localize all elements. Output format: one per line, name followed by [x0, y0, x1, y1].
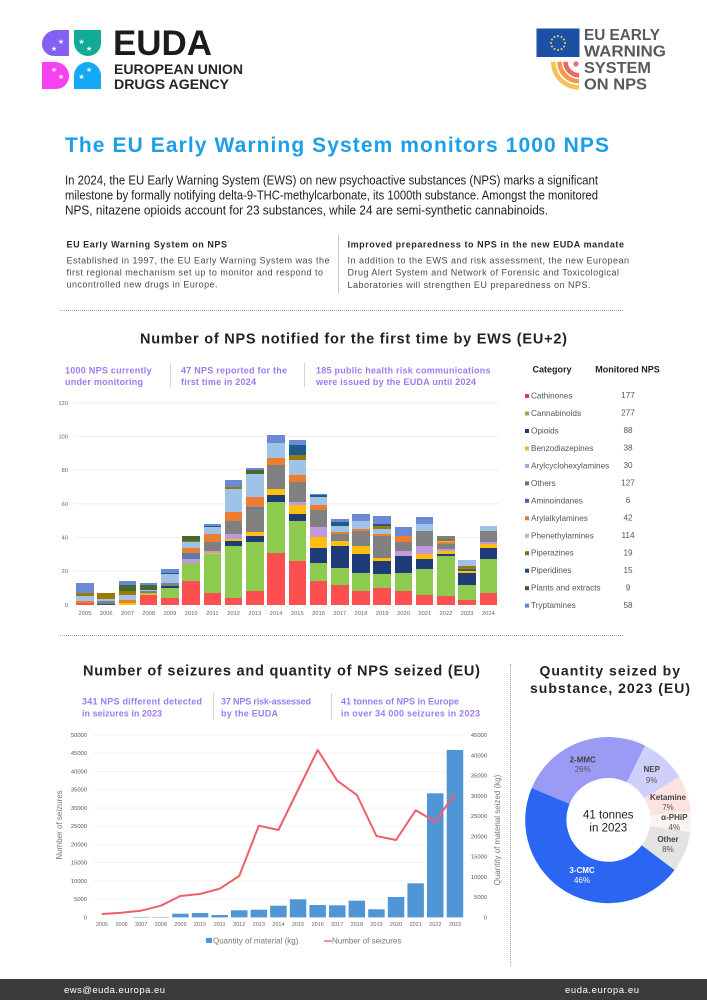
logo: EUDA	[42, 24, 243, 92]
key figures: notifications: 47 NPS reported for the	[181, 365, 287, 375]
panel: Improved preparedness to NPS: In addition to the EWS and risk assessment, the new European	[348, 256, 629, 266]
title: The EU Early Warning System monitors 1000 NPS	[65, 134, 609, 157]
combo chart: seizures and quantity by year: Number of seizures	[332, 936, 401, 946]
logo: EUDA: ★	[78, 73, 85, 81]
legend table: categories and monitored NPS: 30	[623, 461, 633, 470]
logo: EUDA: ★	[86, 66, 92, 74]
legend table: categories and monitored NPS: Plants and extracts	[531, 584, 601, 593]
donut chart: quantity by substance: 9%	[646, 776, 657, 785]
legend table: categories and monitored NPS: 58	[623, 601, 633, 610]
combo chart: seizures and quantity by year: 10000	[71, 879, 87, 885]
stacked bar chart: NPS by year: 2020	[397, 611, 410, 617]
legend table: categories and monitored NPS	[525, 364, 660, 610]
combo chart: seizures and quantity by year: 2017	[331, 922, 343, 928]
legend table: categories and monitored NPS: 127	[621, 478, 635, 488]
combo chart: seizures and quantity by year: 2008	[155, 922, 167, 928]
footer	[0, 979, 707, 1000]
combo chart: seizures and quantity by year: 20000	[71, 842, 87, 848]
stacked bar chart: NPS by year: 100	[58, 434, 68, 440]
combo chart: seizures and quantity by year: 2023	[449, 922, 461, 928]
logo: EU Early Warning System on NPS: ON NPS	[584, 76, 647, 94]
donut chart: quantity by substance: in 2023	[589, 822, 627, 834]
stacked bar chart: NPS by year: 2021	[418, 611, 431, 617]
intro text	[65, 174, 598, 218]
panel: EU Early Warning System on NPS: first regional mechanism set up to monitor and respond to	[66, 268, 323, 278]
donut chart: quantity by substance: 26%	[575, 765, 591, 774]
legend table: categories and monitored NPS: Arylcyclohexylamines	[531, 461, 609, 470]
combo chart: seizures and quantity by year: 2010	[194, 922, 206, 928]
legend table: categories and monitored NPS: Phenethylamines	[531, 531, 594, 540]
panel: EU Early Warning System on NPS: EU Early Warning System on NPS	[66, 240, 227, 250]
stacked bar chart: NPS by year	[58, 401, 499, 617]
key figures: seizures: in over 34 000 seizures in 2023	[341, 708, 480, 718]
footer: euda.europa.eu	[565, 985, 639, 996]
panel: Improved preparedness to NPS: Laboratories will strengthen EU preparedness on NPS.	[348, 280, 590, 290]
combo chart: seizures and quantity by year: 45000	[471, 733, 487, 739]
legend table: categories and monitored NPS: Others	[531, 479, 556, 488]
legend table: categories and monitored NPS: Cannabinoids	[531, 409, 581, 418]
stacked bar chart: NPS by year: 2005	[79, 611, 91, 617]
combo chart: seizures and quantity by year: 2013	[253, 922, 265, 928]
key figures: notifications	[65, 363, 490, 387]
heading: quantity seized by substance: substance, 2023 (EU)	[530, 680, 690, 696]
stacked bar chart: NPS by year: 0	[65, 603, 68, 609]
panel: EU Early Warning System on NPS: uncontrolled new drugs in Europe.	[66, 280, 218, 290]
combo chart: seizures and quantity by year: Quantity of material (kg)	[213, 936, 299, 946]
combo chart: seizures and quantity by year: 2019	[370, 922, 383, 928]
combo chart: seizures and quantity by year: Quantity of material seized (kg)	[493, 774, 502, 885]
logo: EUDA: DRUGS AGENCY	[114, 77, 229, 92]
stacked bar chart: NPS by year: 2008	[142, 611, 155, 617]
combo chart: seizures and quantity by year: 2015	[292, 922, 304, 928]
combo chart: seizures and quantity by year: 15000	[71, 861, 87, 867]
combo chart: seizures and quantity by year: 45000	[71, 751, 87, 757]
logo: EUDA: ★	[58, 73, 64, 81]
legend table: categories and monitored NPS: Benzodiazepines	[531, 444, 593, 453]
combo chart: seizures and quantity by year: 30000	[471, 794, 487, 800]
logo: EU Early Warning System on NPS: WARNING	[584, 44, 666, 60]
stacked bar chart: NPS by year: 2018	[355, 611, 367, 617]
legend table: categories and monitored NPS: 38	[623, 444, 633, 452]
stacked bar chart: NPS by year: 80	[62, 468, 68, 474]
donut chart: quantity by substance: 7%	[662, 803, 674, 812]
key figures: notifications: 185 public health risk communications	[316, 365, 490, 375]
key figures: notifications: were issued by the EUDA until 2024	[315, 377, 476, 387]
combo chart: seizures and quantity by year: 5000	[74, 897, 87, 903]
key figures: seizures	[82, 693, 480, 720]
legend table: categories and monitored NPS: 19	[623, 548, 633, 557]
stacked bar chart: NPS by year: 2017	[333, 611, 346, 617]
combo chart: seizures and quantity by year: 2007	[135, 922, 147, 928]
legend table: categories and monitored NPS: 9	[626, 583, 631, 592]
stacked bar chart: NPS by year: 2007	[121, 611, 134, 617]
heading: quantity seized by substance	[530, 663, 690, 696]
donut chart: quantity by substance: 46%	[574, 876, 590, 885]
combo chart: seizures and quantity by year	[55, 733, 502, 946]
key figures: seizures: 341 NPS different detected	[82, 696, 202, 706]
combo chart: seizures and quantity by year: 15000	[471, 854, 487, 860]
legend table: categories and monitored NPS: 177	[621, 391, 635, 400]
legend table: categories and monitored NPS: 42	[623, 513, 633, 522]
logo: EUDA: ★	[78, 38, 85, 46]
donut chart: quantity by substance: Ketamine	[650, 793, 687, 802]
stacked bar chart: NPS by year: 2011	[206, 611, 219, 617]
legend table: categories and monitored NPS: Category	[532, 364, 572, 374]
panel: Improved preparedness to NPS: Drug Alert System and Network of Forensic and Toxicological	[348, 268, 619, 278]
stacked bar chart: NPS by year: 2010	[185, 611, 198, 617]
combo chart: seizures and quantity by year: 2009	[174, 922, 187, 928]
stacked bar chart: NPS by year: 2006	[100, 611, 113, 617]
stacked bar chart: NPS by year: 120	[58, 401, 68, 407]
stacked bar chart: NPS by year: 2013	[248, 611, 261, 617]
donut chart: quantity by substance: 41 tonnes	[583, 810, 634, 822]
combo chart: seizures and quantity by year: 25000	[71, 824, 87, 830]
combo chart: seizures and quantity by year: 50000	[71, 733, 87, 739]
legend table: categories and monitored NPS: 88	[623, 426, 633, 435]
donut chart: quantity by substance: 2-MMC	[570, 756, 596, 764]
donut chart: quantity by substance: 3-CMC	[569, 866, 595, 875]
key figures: notifications: under monitoring	[65, 377, 143, 387]
panel: Improved preparedness to NPS: Improved preparedness to NPS in the new EUDA mandate	[348, 240, 624, 250]
legend table: categories and monitored NPS: Monitored NPS	[595, 364, 660, 374]
combo chart: seizures and quantity by year: 2022	[429, 922, 441, 928]
stacked bar chart: NPS by year: 2014	[270, 611, 283, 617]
combo chart: seizures and quantity by year: 20000	[471, 834, 487, 840]
legend table: categories and monitored NPS: 6	[626, 496, 631, 505]
heading: NPS notified for the first time: Number of NPS notified for the first time by EWS (EU+2)	[140, 331, 567, 347]
combo chart: seizures and quantity by year: 25000	[471, 814, 487, 820]
combo chart: seizures and quantity by year: 35000	[471, 774, 487, 780]
combo chart: seizures and quantity by year: 0	[484, 915, 487, 921]
key figures: notifications: 1000 NPS currently	[65, 365, 152, 375]
logo: EUDA: ★	[86, 45, 92, 53]
combo chart: seizures and quantity by year: 40000	[471, 753, 487, 759]
panel: EU Early Warning System on NPS: Established in 1997, the EU Early Warning System was the	[66, 256, 330, 266]
combo chart: seizures and quantity by year: 2016	[312, 922, 324, 928]
logo: EUDA: ★	[51, 45, 57, 53]
stacked bar chart: NPS by year: 2022	[439, 611, 452, 617]
logo: EUDA: EUROPEAN UNION	[114, 62, 243, 77]
legend table: categories and monitored NPS: 15	[623, 566, 633, 575]
logo: EU Early Warning System on NPS: EU EARLY	[584, 27, 660, 44]
intro text: In 2024, the EU Early Warning System (EWS) on new psychoactive substances (NPS) marks a significant	[65, 174, 598, 188]
donut chart: quantity by substance: 8%	[662, 845, 674, 854]
key figures: seizures: 41 tonnes of NPS in Europe	[341, 696, 459, 706]
combo chart: seizures and quantity by year: 35000	[71, 788, 87, 794]
combo chart: seizures and quantity by year: Number of seizures	[55, 790, 64, 860]
donut chart: quantity by substance	[525, 737, 691, 904]
heading: seizures and quantity: Number of seizures and quantity of NPS seized (EU)	[83, 664, 480, 680]
combo chart: seizures and quantity by year: 5000	[474, 895, 487, 901]
logo: EUDA: EUDA	[113, 24, 212, 63]
legend table: categories and monitored NPS: Cathinones	[531, 392, 572, 400]
combo chart: seizures and quantity by year: 0	[84, 915, 87, 921]
stacked bar chart: NPS by year: 2024	[482, 611, 496, 617]
key figures: notifications: first time in 2024	[181, 377, 256, 387]
logo: EU Early Warning System on NPS: SYSTEM	[584, 60, 651, 77]
combo chart: seizures and quantity by year: 2005	[96, 922, 108, 928]
key figures: seizures: 37 NPS risk-assessed	[221, 696, 311, 706]
stacked bar chart: NPS by year: 2019	[376, 611, 389, 617]
combo chart: seizures and quantity by year: 10000	[471, 875, 487, 881]
panel: Improved preparedness to NPS	[348, 240, 629, 290]
combo chart: seizures and quantity by year: 2012	[233, 922, 245, 928]
combo chart: seizures and quantity by year: 2020	[390, 922, 402, 928]
footer: ews@euda.europa.eu	[64, 985, 165, 996]
stacked bar chart: NPS by year: 2015	[291, 611, 304, 617]
stacked bar chart: NPS by year: 2016	[312, 611, 325, 617]
stacked bar chart: NPS by year: 40	[62, 536, 68, 542]
legend table: categories and monitored NPS: Aminoindanes	[531, 496, 583, 505]
logo: EUDA: ★	[58, 38, 64, 46]
combo chart: seizures and quantity by year: 2021	[410, 922, 422, 928]
stacked bar chart: NPS by year: 2009	[163, 611, 176, 617]
logo: EUDA: ★	[51, 66, 57, 74]
intro text: NPS, nitazene opioids account for 23 substances, while 24 are semi-synthetic cannabinoids.	[65, 204, 548, 218]
key figures: seizures: by the EUDA	[221, 708, 278, 718]
donut chart: quantity by substance: 4%	[669, 823, 680, 832]
legend table: categories and monitored NPS: 114	[621, 531, 635, 540]
stacked bar chart: NPS by year: 2012	[227, 611, 240, 617]
stacked bar chart: NPS by year: 60	[62, 502, 68, 508]
combo chart: seizures and quantity by year: 2006	[115, 922, 128, 928]
legend table: categories and monitored NPS: Opioids	[531, 426, 559, 436]
combo chart: seizures and quantity by year: 30000	[71, 806, 87, 812]
legend table: categories and monitored NPS: Tryptamines	[531, 601, 576, 610]
key figures: seizures: in seizures in 2023	[82, 708, 162, 718]
heading: quantity seized by substance: Quantity seized by	[540, 663, 680, 679]
donut chart: quantity by substance: NEP	[643, 765, 661, 774]
intro text: milestone by formally notifying delta-9-THC-methylcarbonate, its 1000th substance. Amongst the monitored	[65, 188, 598, 202]
combo chart: seizures and quantity by year: 2014	[272, 922, 285, 928]
panel: EU Early Warning System on NPS	[66, 240, 330, 290]
logo: EU Early Warning System on NPS	[536, 27, 666, 94]
stacked bar chart: NPS by year: 2023	[461, 611, 474, 617]
donut chart: quantity by substance: α-PHiP	[661, 813, 688, 822]
legend table: categories and monitored NPS: 277	[621, 408, 635, 418]
combo chart: seizures and quantity by year: 40000	[71, 770, 87, 776]
donut chart: quantity by substance: Other	[657, 835, 679, 844]
legend table: categories and monitored NPS: Piperidines	[531, 566, 572, 575]
legend table: categories and monitored NPS: Piperazines	[531, 549, 574, 558]
combo chart: seizures and quantity by year: 2018	[351, 922, 363, 928]
combo chart: seizures and quantity by year: 2011	[214, 922, 226, 928]
legend table: categories and monitored NPS: Arylalkylamines	[531, 514, 588, 523]
stacked bar chart: NPS by year: 20	[62, 569, 68, 575]
